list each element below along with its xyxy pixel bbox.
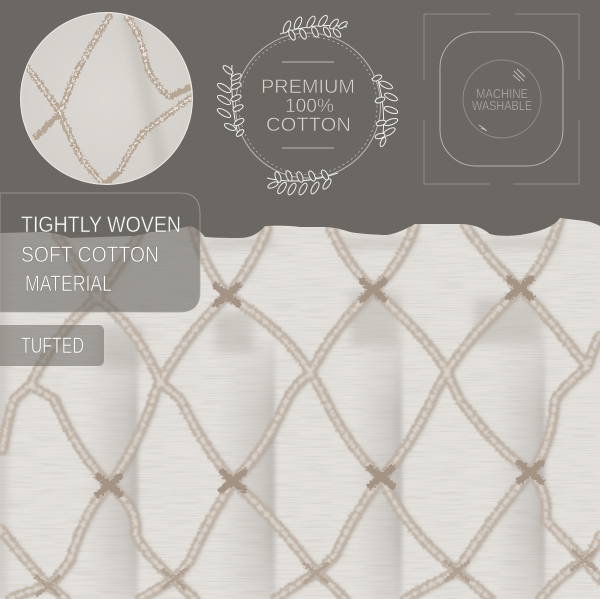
circular fabric close-up bbox=[20, 12, 192, 184]
wreath branches bbox=[216, 14, 399, 196]
material callout text: SOFT COTTON bbox=[21, 242, 159, 267]
glint marks bbox=[479, 69, 525, 131]
machine washable badge bbox=[424, 14, 579, 184]
tufted callout: TUFTED bbox=[21, 333, 84, 358]
washable text bbox=[472, 86, 532, 113]
material callout text: MATERIAL bbox=[25, 271, 112, 296]
inner circle bbox=[463, 60, 541, 138]
material callout panel bbox=[0, 193, 200, 312]
washable text: WASHABLE bbox=[472, 98, 532, 113]
badge text bbox=[261, 76, 355, 136]
wreath rings bbox=[236, 33, 380, 178]
curtain fabric photo bbox=[0, 200, 600, 599]
close-up tufted stitching bbox=[27, 16, 192, 184]
corner frame bbox=[424, 14, 579, 184]
rounded square outline bbox=[440, 32, 563, 166]
material callout text: TIGHTLY WOVEN bbox=[21, 212, 181, 237]
dark header background with wavy fabric edge bbox=[0, 0, 600, 238]
material callout text bbox=[21, 212, 181, 296]
tufted diamond lattice bbox=[0, 217, 600, 599]
washable text: MACHINE bbox=[476, 86, 528, 101]
tufted callout bbox=[0, 325, 104, 366]
badge text: COTTON bbox=[266, 114, 351, 136]
badge text: 100% bbox=[285, 95, 334, 117]
premium 100% cotton wreath badge bbox=[216, 14, 399, 196]
badge text: PREMIUM bbox=[261, 76, 355, 98]
